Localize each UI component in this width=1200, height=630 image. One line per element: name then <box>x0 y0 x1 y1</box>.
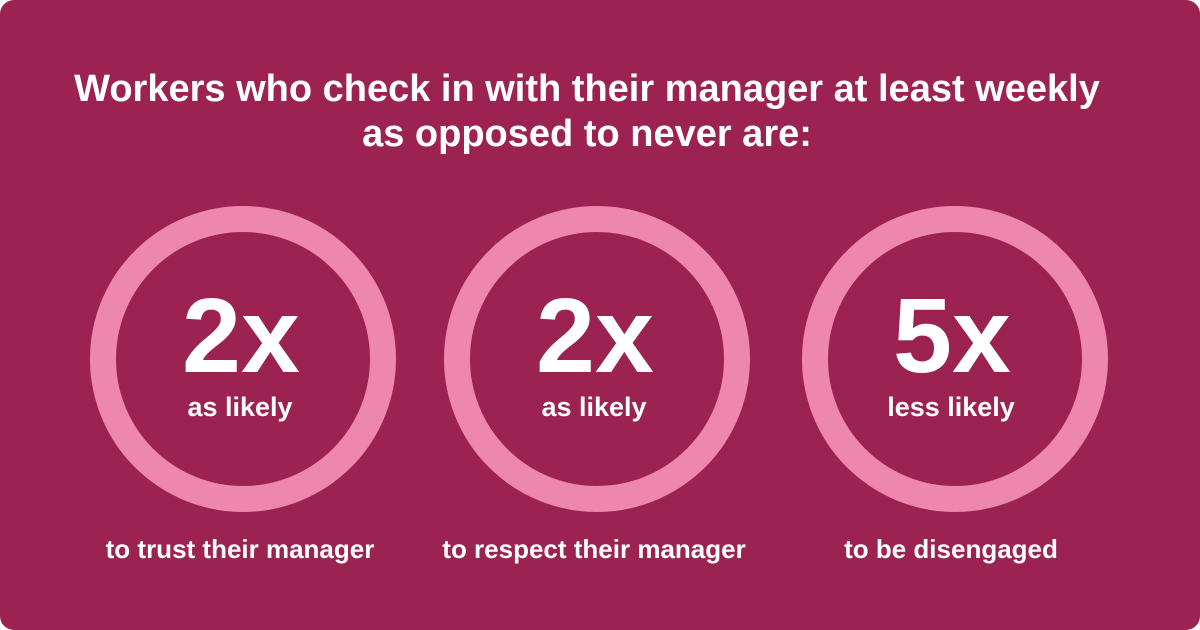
stat 1: trust: to trust their manager <box>106 534 374 564</box>
stat 2: respect: 2x <box>536 277 654 395</box>
title: as opposed to never are: <box>362 113 812 155</box>
stat 3: disengaged: to be disengaged <box>844 534 1058 564</box>
title <box>74 68 1100 155</box>
stat 1: trust: 2x <box>182 277 300 395</box>
stat 3: disengaged <box>815 219 1095 564</box>
stat 2: respect <box>442 219 746 564</box>
stat 3: disengaged: less likely <box>887 392 1015 422</box>
stat 3: disengaged: 5x <box>893 277 1011 395</box>
stat 1: trust: as likely <box>187 392 293 422</box>
title: Workers who check in with their manager at least weekly <box>74 68 1100 110</box>
stat 1: trust <box>103 219 383 564</box>
stat 2: respect: to respect their manager <box>442 534 746 564</box>
stat 2: respect: as likely <box>541 392 647 422</box>
